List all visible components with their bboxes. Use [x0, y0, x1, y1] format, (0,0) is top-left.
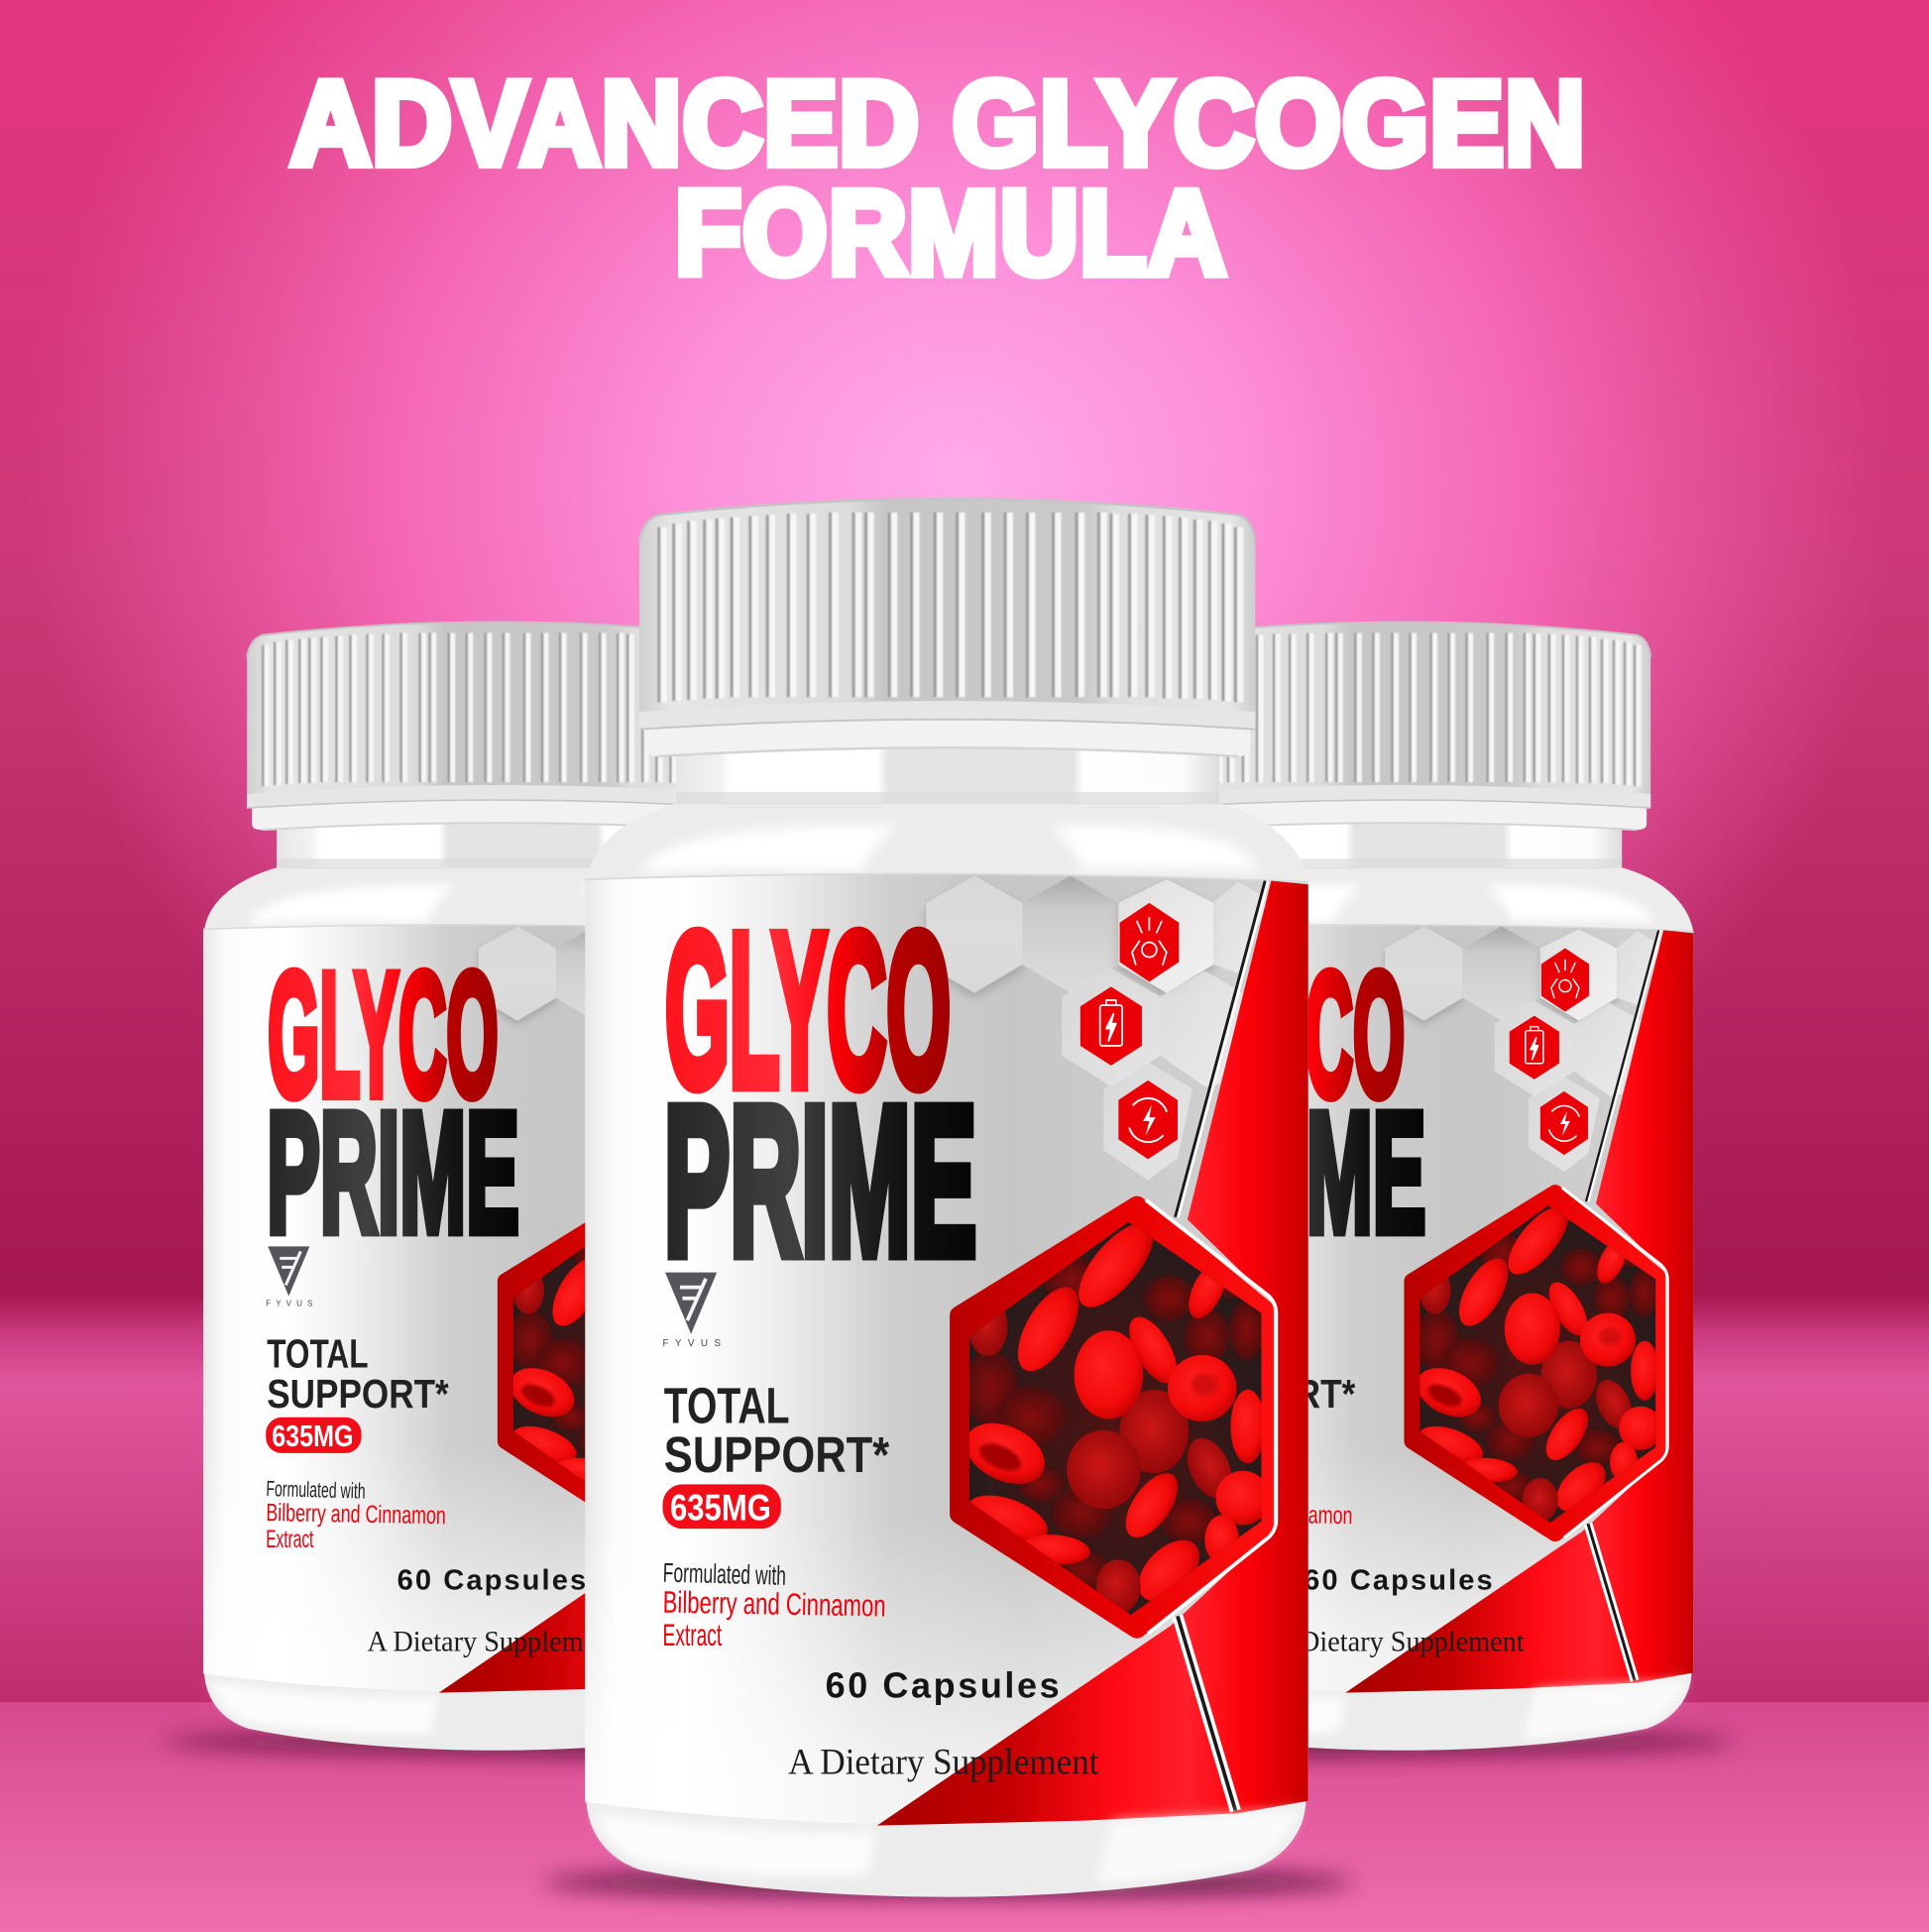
formula note: Bilberry and Cinnamon [266, 1499, 446, 1530]
brand name [664, 888, 976, 1300]
bottle artwork [203, 623, 787, 1751]
shadow: back bottles [161, 1726, 1737, 1758]
total support text: TOTAL [267, 1331, 369, 1377]
brand name: PRIME [267, 1077, 519, 1268]
brand name [267, 938, 519, 1268]
logo: FYVUS [663, 1338, 721, 1349]
title: ADVANCED GLYCOGEN [290, 58, 1586, 189]
logo: FYVUS [266, 1299, 312, 1307]
formula note [662, 1557, 886, 1652]
formula note [266, 1476, 446, 1553]
total support text: TOTAL [664, 1377, 790, 1433]
bottle artwork [585, 499, 1308, 1897]
formula note: Formulated with [662, 1557, 786, 1591]
total support text: SUPPORT* [267, 1371, 449, 1417]
formula note: Extract [266, 1526, 313, 1553]
total support text [664, 1377, 889, 1483]
logo [663, 1273, 721, 1349]
logo [266, 1246, 312, 1307]
formula note: Extract [663, 1618, 722, 1652]
capsule count: 60 Capsules [826, 1664, 1060, 1705]
title [290, 58, 1586, 299]
bottle: right (rear) [1110, 623, 1693, 1751]
supplement line: A Dietary Supplement [1274, 1624, 1525, 1657]
title: FORMULA [675, 168, 1227, 299]
formula note: Bilberry and Cinnamon [1173, 1499, 1353, 1530]
brand name: PRIME [664, 1064, 976, 1300]
total support text: SUPPORT* [664, 1426, 889, 1483]
total support text [267, 1331, 449, 1417]
bottle: left (rear) [203, 623, 787, 1751]
bottle artwork [1110, 623, 1693, 1751]
bottle: center (front) [585, 499, 1308, 1897]
total support text: SUPPORT* [1174, 1371, 1355, 1417]
brand name: GLYCO [268, 938, 499, 1133]
shadow: front bottle [542, 1869, 1355, 1895]
formula note: Formulated with [266, 1476, 366, 1504]
brand name: PRIME [1174, 1077, 1425, 1268]
dosage pill: 635MG [670, 1486, 771, 1528]
dosage pill: 635MG [272, 1421, 353, 1453]
capsule count: 60 Capsules [397, 1564, 586, 1596]
brand name: GLYCO [665, 888, 951, 1132]
brand name: GLYCO [1175, 938, 1405, 1133]
capsule count: 60 Capsules [1304, 1564, 1493, 1596]
brand name [1174, 938, 1425, 1268]
supplement line: A Dietary Supplement [368, 1624, 619, 1657]
supplement line: A Dietary Supplement [788, 1742, 1099, 1782]
formula note: Bilberry and Cinnamon [662, 1585, 886, 1624]
